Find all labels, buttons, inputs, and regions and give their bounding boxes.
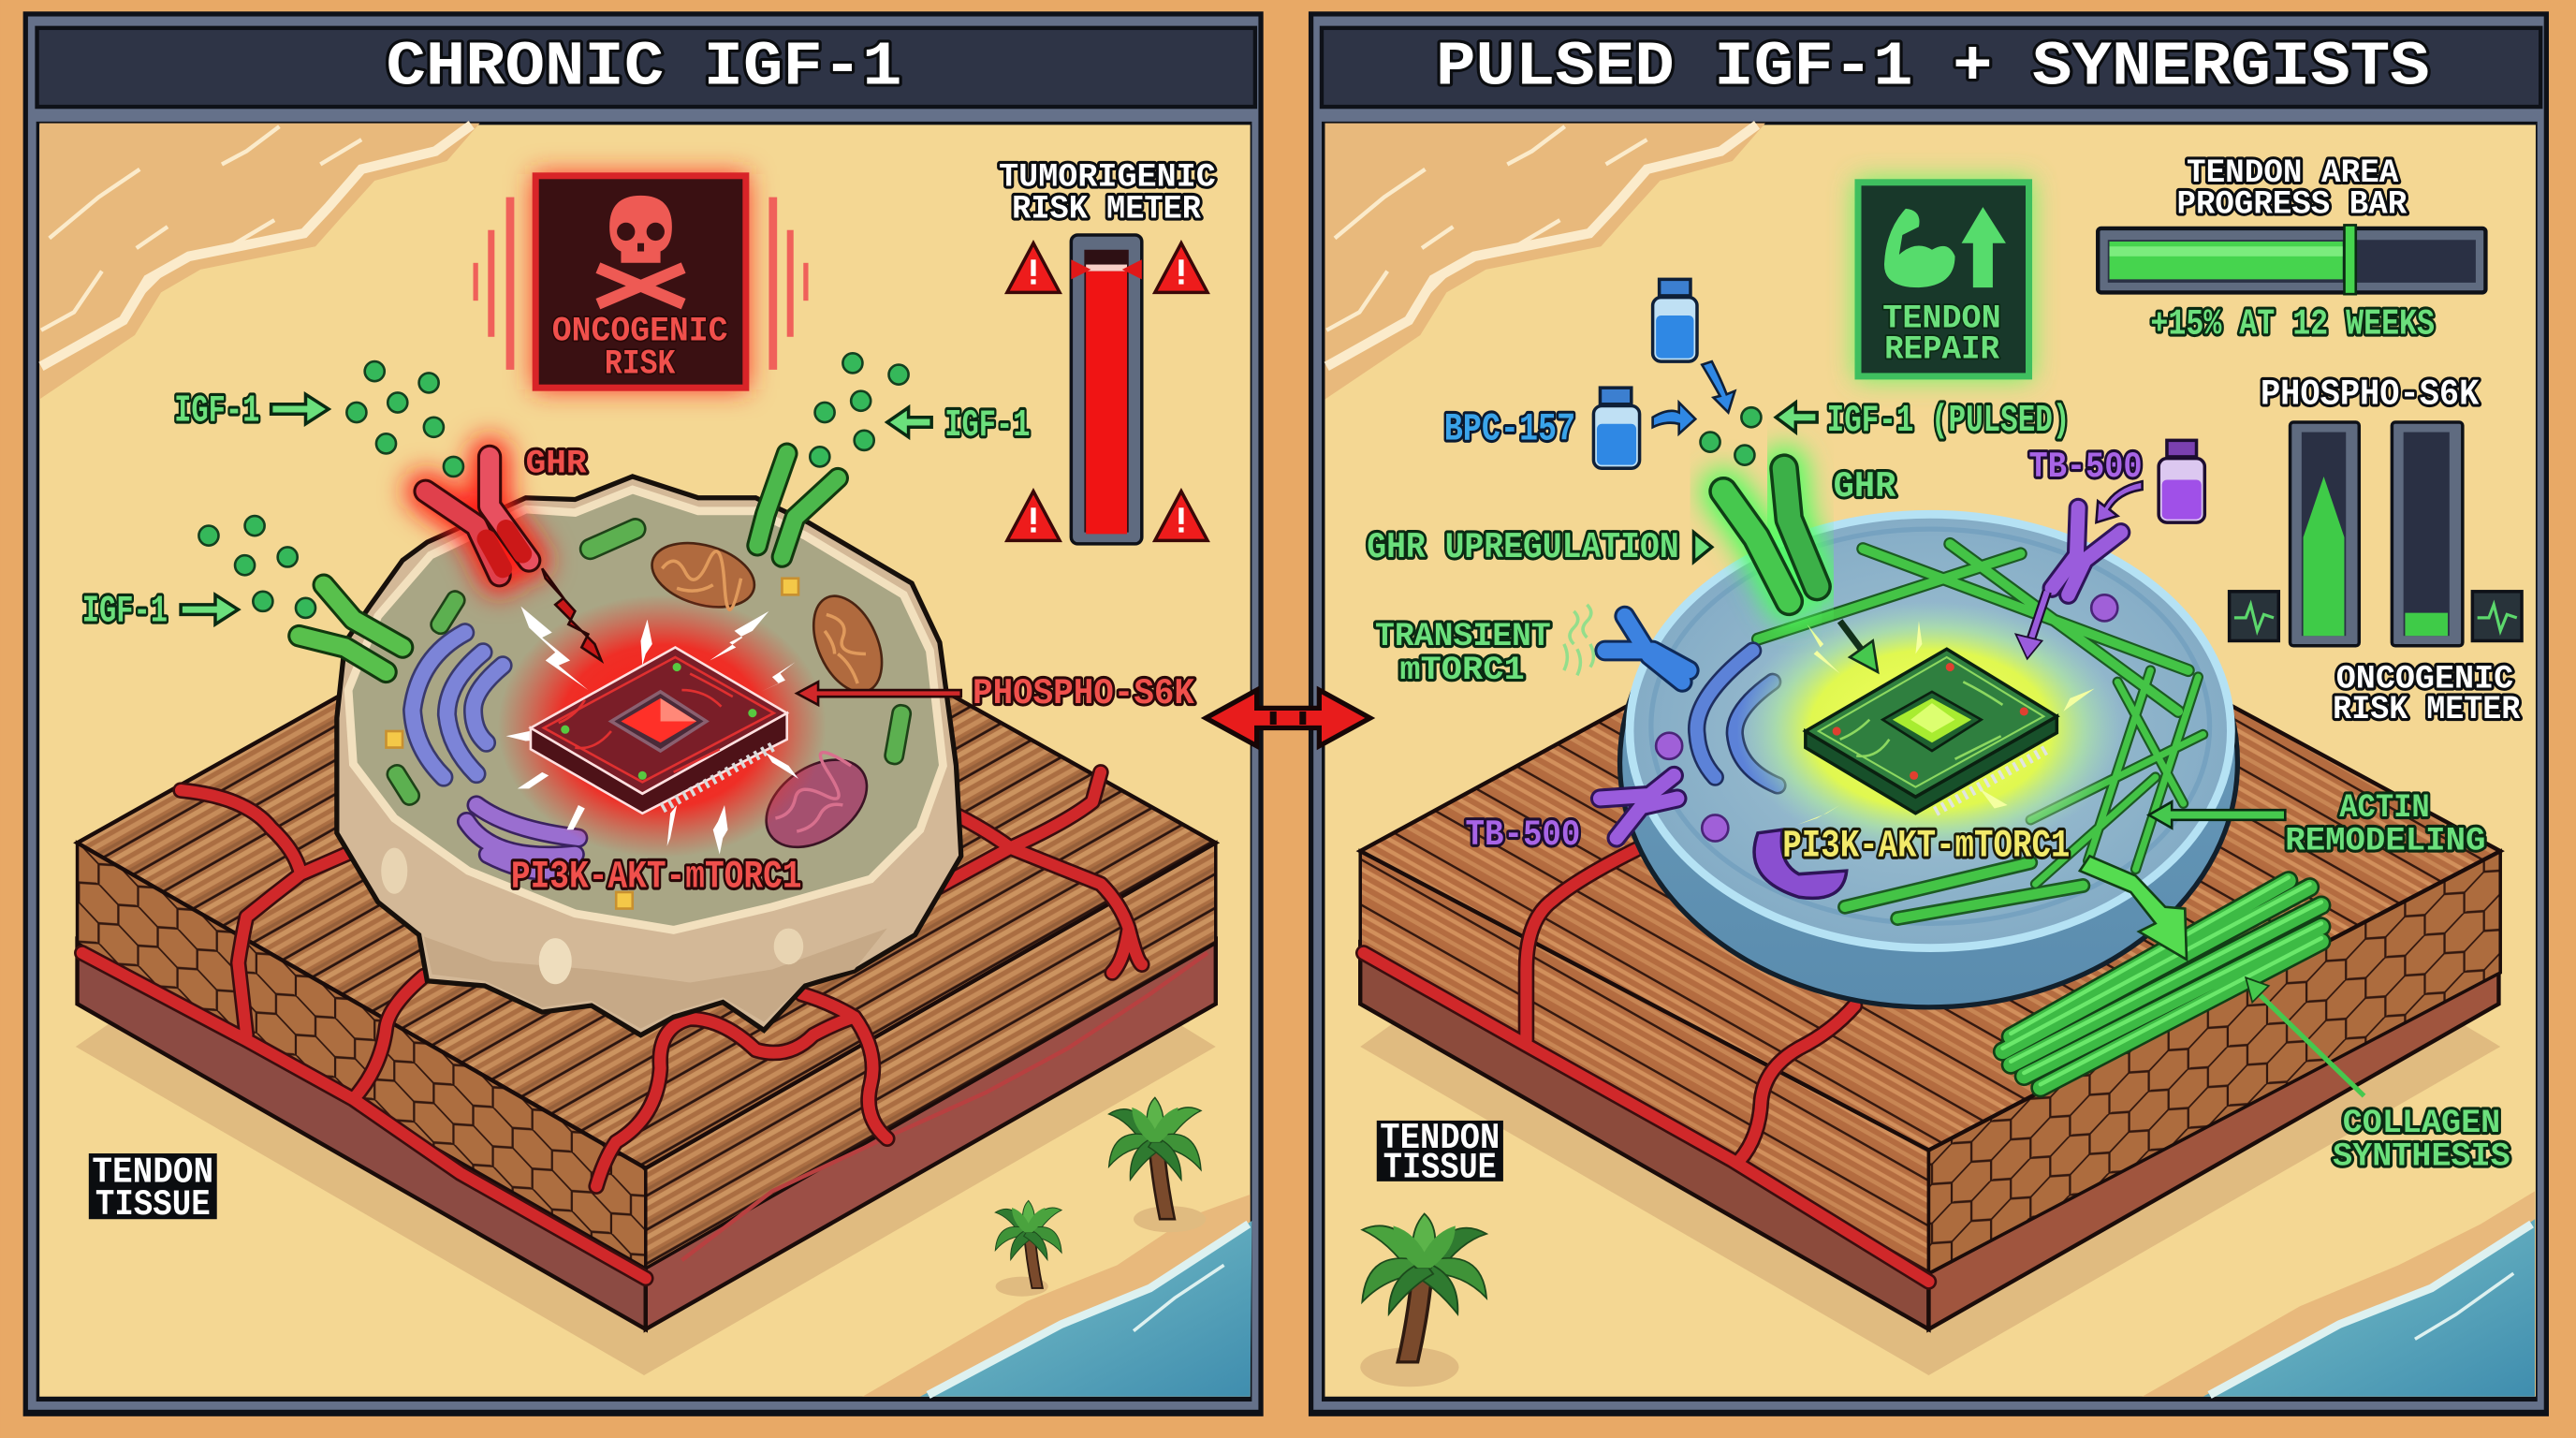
signal bolt: [542, 568, 601, 661]
curved arrow to collagen: [2080, 856, 2187, 960]
label: collagen synthesis: [2333, 1105, 2510, 1175]
label: oncogenic risk meter: ONCOGENIC: [2336, 660, 2513, 697]
left base: [1360, 943, 1928, 1329]
label: GHR upregulation: GHR UPREGULATION: [1367, 527, 1679, 568]
sign body: [535, 176, 746, 388]
panel: chronic IGF-1: [23, 11, 1264, 1416]
vial: TB-500: [2159, 440, 2204, 522]
bar track: [2098, 228, 2485, 292]
label: tendon tissue: [89, 1152, 217, 1225]
phospho-S6K gauge: [2291, 422, 2359, 646]
label: tendon tissue: TISSUE: [1383, 1147, 1497, 1188]
bar title: PROGRESS BAR: [2176, 185, 2408, 223]
bar title: TENDON AREA: [2187, 154, 2399, 192]
blood vessels: [82, 772, 1142, 1278]
label: BPC-157: BPC-157: [1444, 406, 1575, 451]
label: TB-500 top: TB-500: [2029, 447, 2143, 488]
tendon tissue block: [1360, 542, 2500, 1329]
glowing GHR receptor: [1723, 468, 1817, 601]
pink mitochondrion: [750, 741, 883, 865]
ocean corner: [2143, 1191, 2535, 1397]
green receptor left: [299, 585, 402, 672]
label: tendon tissue: TENDON: [92, 1152, 213, 1194]
sign caption: TENDON: [1882, 300, 2001, 337]
comparison double arrow: [1206, 690, 1370, 746]
sign caption: [1882, 300, 2001, 369]
tendon repair sign: [1854, 179, 2032, 379]
vial: BPC-157: [1593, 388, 1640, 468]
header bar: [37, 28, 1255, 107]
small green organelles: [385, 516, 912, 808]
actin filaments: [1758, 544, 2203, 918]
cell outer membrane: [337, 477, 961, 1035]
yellow granules: [386, 579, 798, 909]
blue arrow right: [1653, 403, 1695, 433]
pulsed IGF-1 molecules: [1701, 407, 1761, 465]
sign glow: [534, 174, 748, 389]
label: transient mTORC1: mTORC1: [1399, 652, 1525, 689]
up arrow icon: [1962, 207, 2006, 287]
bar marker: [2344, 225, 2356, 294]
blue receptor: [1605, 616, 1689, 682]
golgi left: [413, 633, 503, 777]
label: phospho-S6K with arrow: [797, 673, 1195, 714]
title: CHRONIC IGF-1: [386, 33, 902, 104]
mitochondrion: [645, 532, 762, 618]
right fiber side: [646, 843, 1216, 1269]
skull and crossbones: [598, 196, 683, 304]
sign caption: ONCOGENIC: [552, 312, 728, 351]
bar value: +15% AT 12 WEEKS: [2150, 303, 2435, 345]
arrow from collagen label: [2246, 977, 2364, 1096]
purple arrow to receptor: [2096, 481, 2143, 522]
sign body: [1858, 183, 2029, 376]
vibration lines: [474, 198, 809, 370]
activated red GHR receptor: [426, 457, 529, 575]
label: TB-500 lower: TB-500: [1466, 814, 1580, 856]
right base: [646, 940, 1216, 1329]
meter title: [999, 158, 1216, 228]
purple organelle: [1754, 829, 1847, 898]
label: tendon tissue: TENDON: [1380, 1118, 1500, 1159]
PI3K-AKT-mTORC1 chip: [531, 647, 787, 814]
bar fill: [2110, 242, 2343, 279]
shoreline with foam: [39, 124, 480, 399]
pulse icon right: [2472, 592, 2522, 640]
golgi lower: [466, 805, 578, 872]
panel: pulsed IGF-1 plus synergists: [1309, 11, 2549, 1416]
top fibers: [1360, 542, 2500, 1151]
healthy cell: [1600, 468, 2237, 1007]
label: IGF-1 lower left: IGF-1: [82, 590, 168, 633]
label: collagen synthesis: SYNTHESIS: [2333, 1137, 2510, 1175]
palm tree large: [1109, 1097, 1206, 1232]
purple receptor lower: [1600, 775, 1677, 838]
tumorigenic risk meter: [999, 158, 1216, 544]
palm tree small: [995, 1200, 1061, 1297]
blue arrow down: [1702, 361, 1734, 413]
label: IGF-1 pulsed with arrow: [1776, 400, 2070, 443]
label: IGF-1 right: [887, 404, 1030, 448]
lightning sparks: [506, 607, 798, 855]
pathway label: PI3K-AKT-mTORC1: [1782, 823, 2070, 868]
right base: [1928, 969, 2498, 1329]
meter tube: [1071, 235, 1142, 544]
label: transient mTORC1: [1375, 618, 1551, 689]
label: tendon tissue: TISSUE: [95, 1184, 211, 1225]
oncogenic risk gauge: [2392, 422, 2463, 646]
collagen bundle: [2002, 877, 2321, 1088]
signal arrow to chip: [1840, 621, 1878, 672]
golgi blue: [1697, 651, 1778, 785]
label: phospho-S6K: PHOSPHO-S6K: [2261, 374, 2480, 416]
right fiber ends: [1928, 851, 2500, 1273]
label: GHR: GHR: [1834, 466, 1896, 507]
sign caption: RISK: [605, 345, 676, 384]
label: actin remodeling with arrow: REMODELING: [2285, 822, 2485, 859]
bar title: [2176, 154, 2408, 223]
warning triangles: [1007, 243, 1208, 540]
label: IGF-1 pulsed with arrow: IGF-1 (PULSED): [1827, 400, 2070, 443]
label: IGF-1 right: IGF-1: [944, 404, 1030, 448]
panel frame: [1309, 11, 2549, 1416]
purple vesicles: [1656, 594, 2117, 842]
label: phospho-S6K with arrow: PHOSPHO-S6K: [973, 673, 1195, 714]
label: transient mTORC1: TRANSIENT: [1375, 618, 1551, 655]
muscle icon: [1884, 209, 1955, 287]
IGF-1 molecules: [198, 353, 909, 618]
shoreline with foam: [1325, 124, 1765, 399]
sand background: [1325, 125, 2536, 1397]
distressed cell: [299, 453, 961, 1035]
label: actin remodeling with arrow: ACTIN: [2339, 789, 2430, 827]
meter title: RISK METER: [1012, 191, 1202, 228]
left fiber ends: [78, 843, 646, 1269]
green receptor top: [757, 453, 838, 557]
top fibers: [78, 524, 1216, 1168]
purple receptor top: [2052, 507, 2121, 594]
purple arrow to chip: [2015, 592, 2047, 659]
sign caption: [552, 312, 728, 384]
sign glow: [1854, 179, 2032, 379]
pulse icon left: [2230, 592, 2278, 640]
tendon tissue block: [78, 524, 1216, 1329]
meter title: TUMORIGENIC: [999, 158, 1216, 196]
ocean corner: [862, 1195, 1251, 1397]
title: PULSED IGF-1 + SYNERGISTS: [1436, 33, 2430, 104]
pathway label: PI3K-AKT-mTORC1: [511, 855, 802, 900]
header bar: [1322, 28, 2540, 107]
red glow: [498, 594, 827, 858]
label: oncogenic risk meter: RISK METER: [2333, 691, 2521, 728]
left base: [78, 940, 646, 1329]
cell lower drip: [381, 848, 887, 1029]
cell body: [1620, 518, 2237, 1007]
sand background: [39, 125, 1251, 1397]
oncogenic risk sign: [474, 174, 809, 389]
label: IGF-1 top left: IGF-1: [174, 389, 259, 433]
inner rim: [1651, 529, 2210, 923]
tendon area progress bar: [2098, 154, 2485, 345]
sign caption: REPAIR: [1884, 331, 2000, 369]
transient signal waves: [1564, 605, 1593, 675]
platform shadow: [76, 986, 1216, 1375]
cell cytoplasm: [348, 490, 943, 930]
blood vessels: [1364, 849, 1928, 1282]
phospho-S6K and oncogenic risk meters: [2230, 374, 2522, 728]
panel frame: [23, 11, 1264, 1416]
lime glow: [1736, 601, 2124, 858]
left fiber side: [1360, 851, 1928, 1273]
label: collagen synthesis: COLLAGEN: [2343, 1105, 2500, 1142]
label: oncogenic risk meter: [2333, 660, 2521, 728]
PI3K-AKT-mTORC1 chip: [1806, 649, 2056, 814]
label: actin remodeling with arrow: [2149, 789, 2485, 859]
faded vessel on base: [681, 953, 1208, 1260]
vial: BPC-157 top: [1653, 279, 1697, 361]
cell surface: [1630, 514, 2231, 948]
platform shadow: [1360, 986, 2500, 1375]
mitochondrion: [800, 585, 896, 703]
green sparks: [1797, 621, 2095, 825]
palm tree: [1360, 1213, 1486, 1387]
label: GHR: GHR: [526, 446, 588, 483]
label: tendon tissue: [1377, 1118, 1503, 1188]
